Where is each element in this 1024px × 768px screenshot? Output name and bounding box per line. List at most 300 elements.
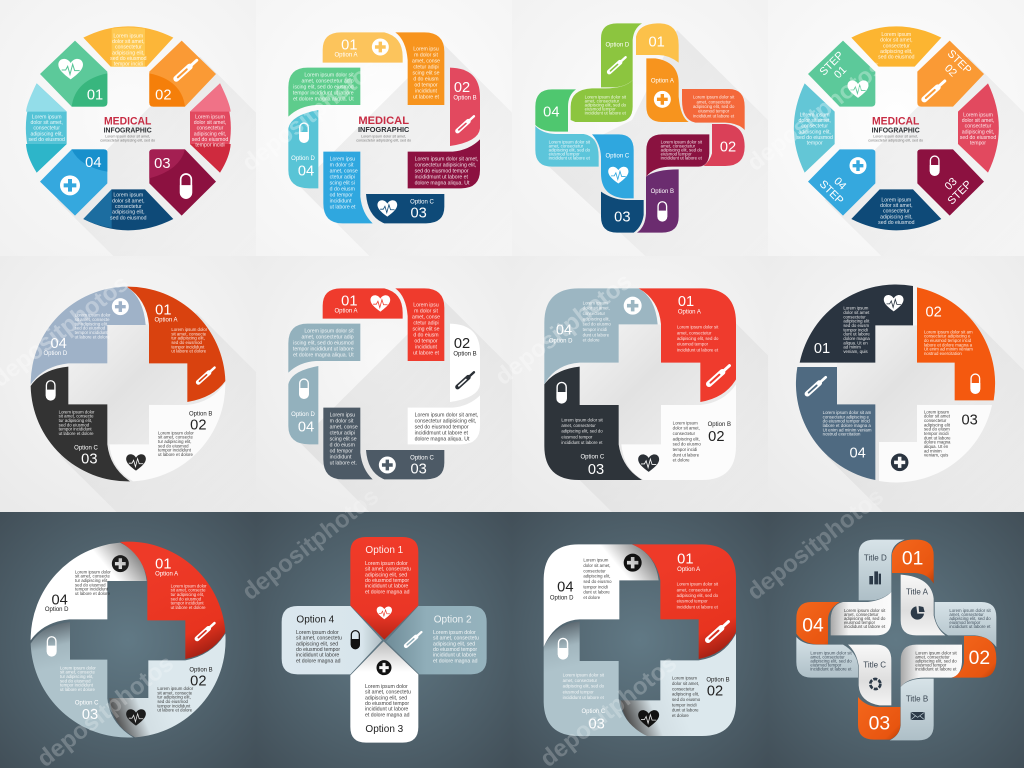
piece: white 04: tur adipiscing elit, — [75, 578, 108, 583]
piece: grey-blue 04: adipiscing elit, — [583, 316, 610, 321]
piece: maroon text: consectetur adipisicing elit, — [415, 162, 476, 168]
panel 6: red and slate rounded frame — [256, 256, 512, 512]
piece: grey-blue 04: tempor incidi — [583, 327, 607, 332]
segment: red text: sed do eiusmod — [960, 135, 996, 141]
piece: white 02: 02 — [454, 336, 470, 352]
piece: orange 02 — [952, 636, 996, 678]
piece: black 03: ut labore et dolore — [59, 431, 94, 436]
piece: dark 01: dolor sit amet — [843, 310, 870, 315]
piece: pale 02: sit amet, consecte — [157, 690, 193, 695]
piece: red 01: adipiscing elit, sed do — [677, 336, 719, 341]
centre title — [100, 116, 155, 142]
petal: option 1: Lorem ipsum dolor — [365, 561, 408, 567]
piece: lime option D — [601, 23, 642, 87]
piece: grey-blue text: iscing elit, sed do eiusmod — [293, 341, 354, 347]
piece: blue text — [323, 152, 373, 223]
piece: dark 01: Lorem ipsum — [843, 306, 869, 311]
piece: pale 02: 02 — [707, 684, 723, 700]
piece: yellow 01: Option A — [334, 52, 358, 58]
piece: white 03 — [879, 405, 992, 482]
piece: white 03: aliqua. Ut en — [924, 444, 949, 449]
segment: green step 01 — [40, 41, 107, 107]
piece: white text: consectetur adipisicing elit, — [415, 418, 476, 424]
piece: dark 01: adipiscing elit — [843, 319, 870, 324]
segment: navy text: dolor sit amet, — [112, 198, 145, 204]
piece: lime option D: Option D — [605, 43, 630, 49]
piece: white 03: tempor incidi — [924, 431, 949, 436]
segment: red text: Lorem ipsum — [963, 112, 993, 118]
piece: white 02: dolor sit amet, — [673, 426, 700, 431]
piece: red 01: Lorem ipsum dolor sit — [677, 582, 719, 587]
piece: blue text: od tempor — [330, 193, 353, 199]
piece: red 01 — [323, 288, 403, 319]
piece: orange 01 — [892, 540, 934, 584]
piece: pale text: Lorem ipsum dolor sit — [915, 651, 958, 656]
segment: navy text — [83, 189, 173, 230]
piece: blue-grey 04: sit amet, consecte — [75, 317, 110, 322]
piece: orange 02: do eiusmod tempor incid — [924, 338, 972, 343]
piece: cyan text: adipiscing elit, sed do — [549, 148, 591, 153]
segment: yellow text: sed do eiusmod — [110, 56, 147, 62]
piece: grey-blue 03: ut labore et dolore — [60, 687, 95, 692]
piece: cyan text: Lorem ipsum dolor sit — [549, 140, 591, 145]
piece: red 01: Option A — [155, 571, 178, 577]
piece: lime text: adipiscing elit, sed do — [585, 103, 627, 108]
piece: grey text: eiusmod tempor — [949, 620, 981, 625]
piece: dark 01 — [800, 285, 913, 363]
piece: blue-grey 04: tempor incididunt — [75, 330, 108, 335]
piece: red 01: Option A — [677, 567, 700, 573]
piece: title A — [901, 575, 945, 635]
piece: tomato text: Lorem ipsum dolor sit — [693, 95, 735, 100]
piece: pale 02: dolor sit amet, — [672, 681, 699, 686]
centre title: MEDICAL — [358, 115, 409, 127]
piece: grey-blue 03: adipiscing elit, sed do — [563, 684, 605, 689]
piece: dark 01: dolore magna — [843, 336, 870, 341]
piece: slate 03: 03 — [411, 462, 427, 478]
piece: title C — [848, 645, 891, 705]
segment: navy text: consectetur — [883, 209, 910, 215]
piece: grey text left: adipiscing elit, sed do — [810, 659, 852, 664]
centre title: consectetur adipiscing elit, sed do — [100, 138, 155, 142]
piece: navy 03: 03 — [614, 209, 630, 225]
piece: orange text: m dolor sit — [414, 53, 438, 59]
piece: white 02: sed do eiusmod — [158, 443, 189, 448]
piece: tomato text: incididunt ut labore et — [693, 113, 735, 118]
piece: red 01 — [120, 542, 225, 659]
petal: option 4: Option 4 — [296, 615, 335, 626]
piece: blue-grey 04 — [31, 287, 146, 384]
piece: purple option B — [637, 169, 679, 233]
piece: grey-blue 04 — [544, 288, 658, 384]
centre title — [356, 115, 411, 143]
piece: orange text: ctetur adipi — [413, 65, 439, 71]
piece: grey-blue 03: tur adipiscing elit, — [60, 674, 93, 679]
segment: blue step 04 — [808, 149, 875, 216]
piece: cyan 04: 04 — [298, 163, 314, 179]
piece: blue text: ctetur adipi — [330, 175, 355, 181]
piece: white 02: sit amet, consecte — [158, 435, 193, 440]
piece: white 02: tur adipiscing elit, — [158, 439, 191, 444]
piece: white 02: ut labore et dolore — [158, 452, 193, 457]
segment: maroon step 03: 03 — [943, 176, 960, 193]
piece: green text: et dolore magna aliqua. Ut — [293, 97, 354, 103]
piece: red 01: ut labore et dolore — [171, 605, 206, 610]
segment: cyan text — [794, 83, 835, 173]
piece: navy 03: 03 — [411, 206, 427, 222]
piece: blue text: Lorem ipsu — [330, 157, 355, 163]
piece: grey-blue 04: 04 — [298, 419, 314, 435]
piece: grey text — [935, 602, 996, 647]
petal: option 3: do eiusmod tempor — [365, 701, 409, 707]
piece: grey-blue 03: Lorem ipsum dolor — [60, 665, 96, 670]
watermarks: depositphotos — [237, 54, 384, 177]
piece: pale 02: adipiscing elit, — [672, 692, 699, 697]
piece: grey-blue 03: Option C — [581, 709, 606, 715]
piece: pale text: eiusmod tempor — [915, 663, 947, 668]
segment: navy text: Lorem ipsum — [113, 193, 143, 199]
petal: option 2: adipiscing elit, sed — [433, 641, 475, 647]
piece: green text: amet, consectetur adip — [301, 79, 354, 85]
petal: option 1: Option 1 — [365, 545, 404, 556]
piece: white 02: consectetur — [673, 431, 696, 436]
panel 11: dark rounded square with cross — [512, 512, 768, 768]
piece: grey-blue 03: Lorem ipsum dolor sit — [563, 672, 605, 677]
petal: option 1 — [350, 537, 418, 640]
piece: grey-blue 03: 03 — [589, 717, 605, 733]
piece: red text: amet, conse — [412, 315, 440, 321]
piece: pale 02: dunt ut labore — [672, 708, 699, 713]
piece: pale 02: et dolore — [672, 713, 689, 718]
piece: white 04: Option D — [45, 607, 69, 613]
piece: black 03 — [31, 367, 130, 481]
piece: red 01: 01 — [678, 294, 694, 310]
piece: red 01: 01 — [677, 551, 693, 567]
piece: red 01: Option A — [678, 310, 701, 316]
piece: grey-blue 04: Lorem ipsum — [583, 300, 608, 305]
piece: red 01 — [632, 544, 736, 659]
piece: orange text: ut labore et — [413, 95, 439, 101]
centre title: Lorem ipsum dolor sit amet, — [873, 135, 918, 139]
segment: blue step 04: 04 — [831, 175, 848, 192]
piece: pale 02: sed do eiusmod — [157, 699, 188, 704]
piece: pale 02: consectetur — [672, 686, 695, 691]
piece: black 03: eiusmod tempor — [561, 434, 593, 439]
segment: red text — [190, 83, 231, 173]
panel 4: eight-segment step circle — [768, 0, 1024, 256]
segment: maroon step 03: 03 — [154, 156, 170, 172]
piece: white 03: ad minim — [924, 448, 942, 453]
segment: red text: adipiscing elit, — [962, 129, 994, 135]
segment: red text: sed do eiusmod — [192, 137, 228, 143]
piece: white 03: dolore magna — [924, 440, 951, 445]
piece: black 03: tempor incididunt — [59, 427, 92, 432]
piece: grey-blue 04 — [288, 366, 318, 444]
piece: red 01: sed do eiusmod — [171, 596, 202, 601]
piece: pale 02 — [621, 634, 736, 736]
piece: pale text: incididunt ut labore et — [915, 667, 957, 672]
piece: pale text — [901, 645, 962, 687]
petal: option 2: Option 2 — [434, 615, 472, 626]
piece: white text — [408, 395, 480, 444]
piece: red 02: 02 — [454, 80, 470, 96]
piece: red 01: adipiscing elit, sed do — [677, 593, 719, 598]
piece: orange 02: consectetur adipiscing e — [924, 334, 971, 339]
piece: red text: ut labore et — [413, 351, 439, 357]
piece: pale 02 — [109, 634, 226, 737]
piece: title B: Title B — [906, 695, 928, 704]
piece: white 04: 04 — [52, 592, 68, 608]
piece: white 03: veniam, quis — [924, 453, 948, 458]
piece: grey-blue 04: sed do eiusmo — [583, 322, 611, 327]
piece: green text: Lorem ipsum dolor sit — [304, 73, 354, 79]
piece: red text — [395, 288, 444, 361]
watermarks: depositphotos — [237, 483, 384, 606]
piece: black 03: tur adipiscing elit, — [59, 418, 92, 423]
piece: title A: Title A — [906, 588, 929, 597]
piece: dark 01: dunt ut labore — [843, 332, 870, 337]
piece: white 04: tempor incidi — [583, 584, 608, 589]
segment: green step 01: 01 — [832, 64, 849, 81]
piece: slate text: ut labore et. — [330, 461, 357, 467]
piece: grey-blue 04: 04 — [556, 323, 572, 339]
piece: black 03 — [544, 367, 642, 480]
piece: pale 02: 02 — [190, 673, 206, 689]
piece: grey text left: incididunt ut labore et — [810, 667, 852, 672]
piece: orange-red 01: sit amet, consecte — [171, 331, 207, 336]
piece: slate text: m dolor sit — [330, 419, 354, 425]
piece: cyan text: eiusmod tempor — [549, 152, 580, 157]
piece: dark 01: tempor incidi — [843, 327, 868, 332]
segment: green step 01: 01 — [87, 88, 103, 104]
segment: cyan text: adipiscing elit, — [30, 131, 63, 137]
piece: pale 02: tempor incididunt — [157, 703, 191, 708]
petal: option 3: incididunt ut labore — [365, 707, 408, 713]
piece: maroon text: Lorem ipsum dolor sit amet, — [415, 156, 478, 162]
piece: red 01: tur adipiscing elit, — [171, 592, 204, 597]
piece: white 04: Lorem ipsum — [583, 558, 609, 563]
piece: slate text: ctetur adipi — [330, 431, 355, 437]
piece: orange 02: Ut enim ad minim veniam — [924, 347, 973, 352]
piece: white 03: adipiscing elit — [924, 422, 951, 427]
piece: orange 04: 04 — [802, 615, 824, 636]
piece: maroon text: incididunt ut labore et — [661, 156, 703, 161]
piece: blue-grey 04: ut labore et dolore — [75, 334, 110, 339]
piece: black 03: Option C — [74, 446, 99, 452]
segment: blue step 04 — [40, 149, 107, 216]
panel 1: eight-segment colour circle — [0, 0, 256, 256]
piece: orange-red 01: Option A — [154, 318, 178, 324]
piece: slate text: od tempor — [330, 449, 353, 455]
piece: maroon text: incididmunt ut labore et — [415, 174, 469, 180]
piece: tomato text — [682, 89, 745, 130]
piece: red 01: Lorem ipsum dolor sit — [677, 325, 719, 330]
piece: orange text: scing elit se — [413, 71, 440, 77]
piece: blue-grey 04: sed do eiusmod — [75, 326, 106, 331]
piece: white 04: Lorem ipsum dolor — [75, 569, 111, 574]
piece: grey text: incididunt ut labore et — [949, 624, 991, 629]
piece: red 01: amet, consectetur — [677, 587, 712, 592]
piece: red 01: incididunt ut labore et — [677, 604, 719, 609]
piece: tomato text: eiusmod tempor — [698, 109, 730, 114]
piece: purple option B: Option B — [651, 189, 674, 195]
centre title: INFOGRAPHIC — [872, 125, 920, 134]
segment: cyan text: dolor sit amet, — [30, 120, 63, 126]
piece: green text: tempor incididunt ut labore — [293, 91, 354, 97]
piece: grey-blue 03 — [544, 621, 647, 736]
piece: grey text left — [796, 637, 858, 678]
petal: option 1: adipiscing elit, sed — [365, 572, 407, 578]
piece: slate text: incididunt — [330, 455, 352, 461]
piece: black 03: amet, consectetur — [561, 423, 596, 428]
piece: blue option C: Option C — [605, 154, 630, 160]
piece: red 02: Option B — [453, 95, 477, 101]
piece: tomato text: adipiscing elit, sed do — [693, 104, 735, 109]
centre title: INFOGRAPHIC — [358, 125, 410, 134]
piece: cyan text — [535, 126, 599, 167]
panel 10: four petal options — [256, 512, 512, 768]
piece: white 03: 03 — [962, 412, 978, 428]
piece: red text: d do eiusm — [413, 333, 439, 339]
petal: option 2 — [386, 606, 487, 674]
piece: dark 01: sed do eiusm — [843, 323, 869, 328]
piece: black 03: Option C — [580, 454, 605, 460]
piece: grey-blue 04: Option D — [291, 412, 316, 418]
segment: cyan text: sed do eiusmod — [28, 137, 65, 143]
segment: red text: dolor sit amet, — [962, 118, 994, 124]
piece: white 02: sed do eiusmo — [673, 442, 701, 447]
piece: blue-grey 04: tur adipiscing elit, — [75, 321, 108, 326]
segment: red text: consectetur — [965, 124, 992, 130]
piece: grey-blue 03: 03 — [82, 707, 98, 723]
piece: white 03: Lorem ipsum — [924, 409, 949, 414]
piece: grey-blue 03: Option C — [75, 700, 99, 706]
piece: maroon text — [646, 134, 709, 177]
piece: pale text: adipiscing elit, sed do — [915, 659, 957, 664]
petal: option 3: sit amet, consectetu — [365, 690, 411, 696]
piece: white 02: tempor incididunt — [158, 448, 192, 453]
piece: white 04: adipiscing elit, — [583, 574, 611, 579]
piece: yellow 01: 01 — [341, 37, 357, 53]
piece: maroon text: eiusmod tempor — [661, 152, 692, 157]
piece: maroon text: adipiscing elit, sed do — [661, 148, 703, 153]
piece: white 02: 02 — [708, 429, 724, 445]
piece: black 03: Lorem ipsum dolor — [59, 409, 95, 414]
petal: option 3 — [350, 641, 418, 743]
centre title: MEDICAL — [872, 116, 920, 128]
petal: option 2: sit amet, consectetu — [433, 636, 479, 642]
piece: white 02: adipiscing elit, — [673, 436, 700, 441]
piece: navy 03 — [366, 194, 444, 223]
piece: white 04: 04 — [557, 579, 573, 595]
piece: cyan text: incididunt ut labore et — [549, 156, 591, 161]
petal: option 4: incididunt ut labore — [296, 653, 339, 659]
segment: navy text: adipiscing elit, — [880, 214, 913, 220]
piece: pale 02: Option B — [706, 677, 730, 683]
piece: grey-blue 03: eiusmod tempor — [563, 689, 594, 694]
piece: lime text: amet, consectetur — [585, 99, 620, 104]
segment: yellow text — [83, 26, 173, 68]
segment: cyan text: consectetur — [801, 124, 828, 130]
piece: grey-blue 04: Option D — [549, 339, 573, 345]
piece: black 03: sit amet, consecte — [59, 414, 94, 419]
piece: white 02 — [450, 324, 480, 402]
piece: white text: dolore magna aliqua. Ut — [415, 436, 470, 442]
piece: orange 04 — [796, 602, 840, 644]
piece: grey-blue text — [288, 324, 360, 373]
piece: pale 02: Option B — [189, 668, 213, 674]
segment: cyan text: Lorem ipsum — [800, 112, 830, 118]
piece: red 02 — [450, 68, 480, 146]
segment: yellow text: Lorem ipsum — [113, 33, 143, 39]
piece: grey-blue 03: tempor incididunt — [60, 683, 94, 688]
segment: red text: tempor — [970, 141, 986, 147]
piece: white 04: ut labore et dolore — [75, 591, 110, 596]
piece: orange text — [395, 32, 444, 105]
petal: option 2: incididunt ut labore — [433, 653, 476, 659]
piece: grey-blue text: Lorem ipsum dolor sit — [304, 329, 354, 335]
piece: blue option C — [592, 134, 634, 198]
piece: white text: incididmunt ut labore et — [415, 430, 469, 436]
piece: white 02 — [621, 384, 736, 480]
piece: slate 04: nostrud exercitation — [823, 432, 861, 437]
piece: white 03: dunt ut labore — [924, 435, 951, 440]
piece: red 01: incididunt ut labore et — [677, 347, 719, 352]
segment: cyan text: Lorem ipsum — [32, 114, 62, 120]
segment: navy text: Lorem ipsum — [881, 197, 911, 203]
piece: red 01: eiusmod tempor — [677, 342, 709, 347]
piece: red 02: 02 — [720, 140, 736, 156]
piece: orange text: od tempor — [414, 83, 438, 89]
segment: orange step 02 — [917, 41, 984, 107]
piece: pale text upper: adipiscing elit, sed do — [844, 616, 886, 621]
piece: pale text upper: eiusmod tempor — [844, 620, 876, 625]
piece: slate 04 — [796, 367, 875, 480]
piece: white 02 — [109, 383, 225, 481]
piece: white 04 — [544, 544, 659, 647]
segment: maroon step 03 — [917, 149, 984, 216]
panel 2: rounded colour frame — [256, 0, 512, 256]
piece: dark 01: 01 — [814, 341, 830, 357]
piece: grey text left: Lorem ipsum dolor sit — [810, 651, 853, 656]
segment: navy text: consectetur — [115, 204, 142, 210]
piece: white 04: dolor sit amet, — [583, 563, 611, 568]
piece: orange-red 01: tempor incididunt — [171, 344, 205, 349]
segment: blue step 04: STEP — [817, 178, 845, 207]
segment: green step 01 — [808, 41, 875, 107]
piece: orange 02: labore et dolore magna a — [924, 342, 973, 347]
piece: pale 02: Lorem ipsum dolor — [157, 686, 194, 691]
piece: orange 02: nostrud exercitation — [924, 351, 962, 356]
petal: option 4: Lorem ipsum dolor — [296, 630, 339, 636]
watermarks: depositphotos — [742, 483, 889, 606]
piece: black 03: sed do eiusmod — [59, 422, 90, 427]
segment: yellow text: Lorem ipsum — [881, 32, 911, 38]
segment: green step 01: STEP — [817, 49, 846, 78]
centre title: MEDICAL — [104, 116, 152, 128]
watermarks: depositphotos — [742, 54, 889, 177]
segment: navy text: dolor sit amet, — [880, 203, 913, 209]
panel 9: dark circle with cross — [0, 512, 256, 768]
piece: red text: scing elit se — [413, 327, 440, 333]
piece: red 02 — [704, 124, 745, 166]
centre title: consectetur adipiscing elit, sed do — [356, 139, 411, 143]
petal: option 1: incididunt ut labore — [365, 584, 408, 590]
segment: yellow text: tempor incidi — [114, 62, 143, 68]
piece: blue text: m dolor sit — [330, 163, 354, 169]
piece: blue text: amet, conse — [330, 169, 358, 175]
piece: grey-blue 04: dolor sit amet, — [583, 306, 610, 311]
